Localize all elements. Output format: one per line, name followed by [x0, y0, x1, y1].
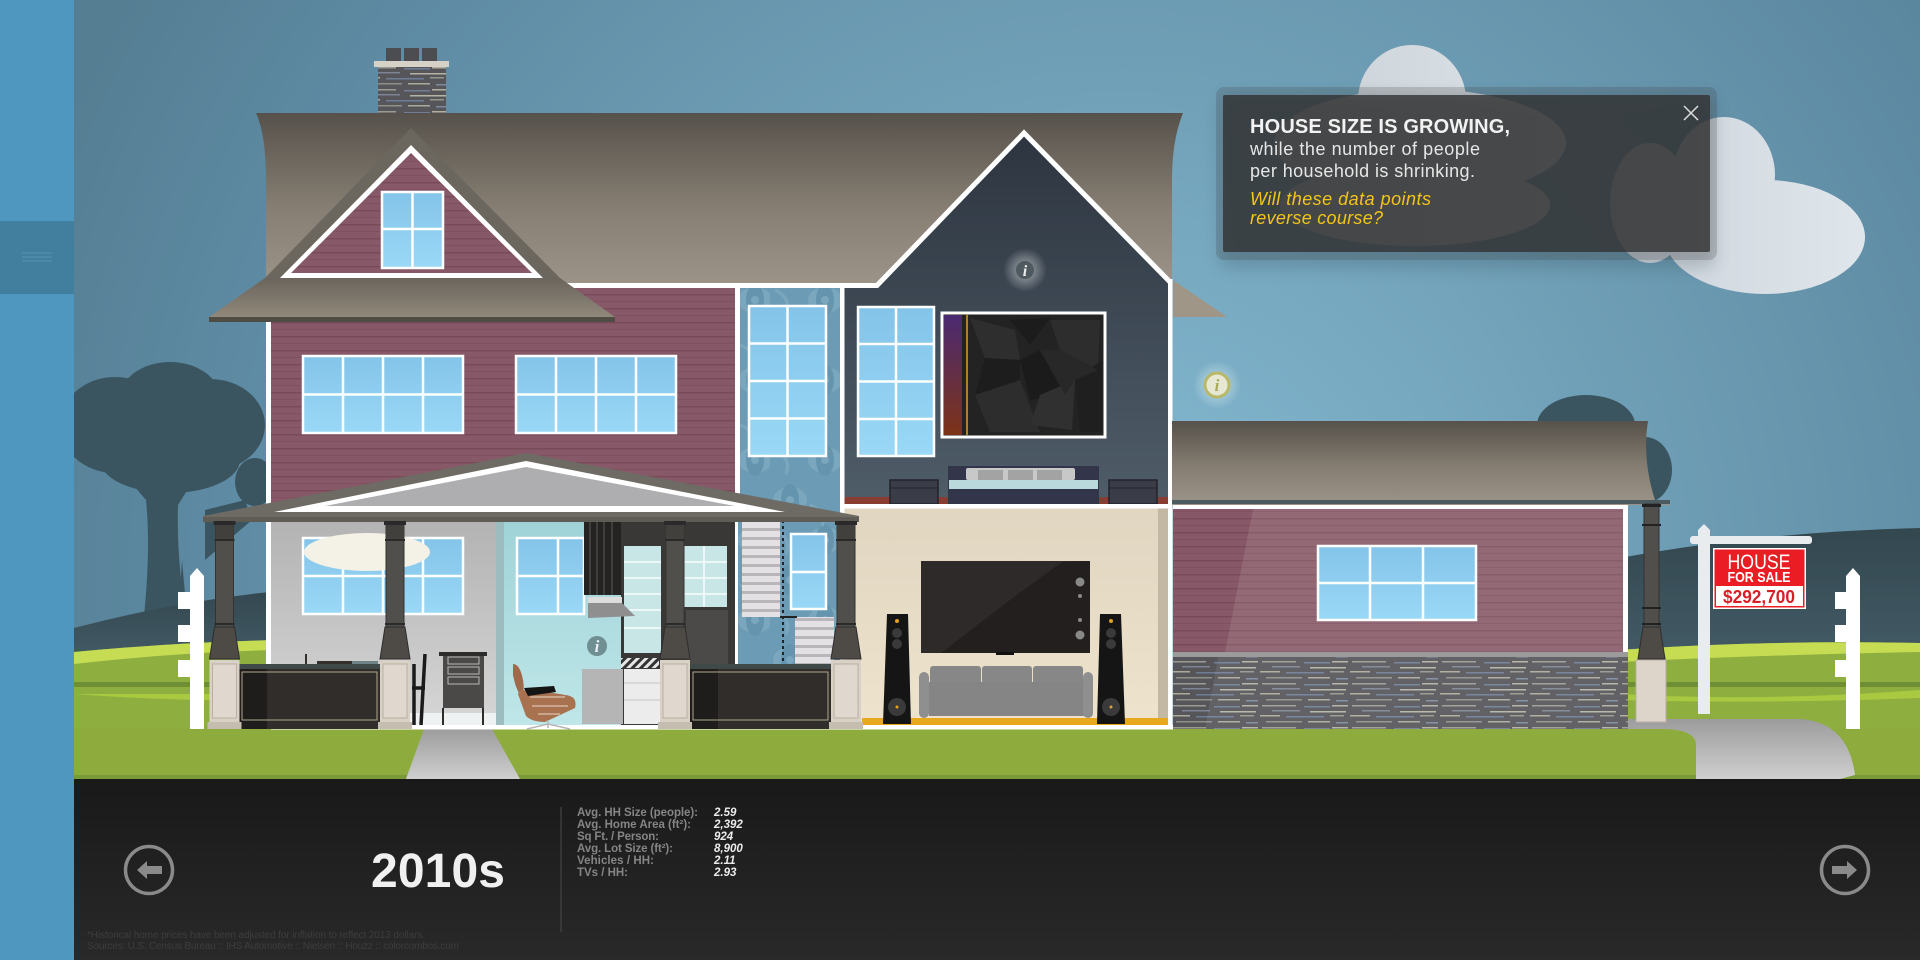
kitchen backsplash curtain and hood — [584, 520, 635, 618]
window: porch left — [303, 538, 463, 614]
window: media room — [858, 307, 934, 456]
main roof — [256, 113, 1183, 285]
speaker: left — [883, 614, 911, 724]
stat labels: Avg. HH Size (people): — [577, 807, 698, 819]
stat labels — [577, 807, 698, 879]
info icon: media room — [1003, 248, 1047, 292]
previous arrow — [126, 846, 172, 894]
callout body: while the number of people — [1249, 139, 1480, 159]
callout question: reverse course? — [1250, 208, 1383, 228]
tree: right silhouette — [1537, 395, 1672, 503]
front walkway — [406, 729, 520, 779]
info icon: house size — [1193, 361, 1241, 409]
info icon: media room: i — [1023, 263, 1028, 280]
footnote sources — [87, 930, 459, 952]
right roof overhang — [1173, 280, 1227, 317]
wall art — [942, 313, 1105, 437]
footer bar — [0, 779, 1920, 960]
computer on counter — [305, 654, 378, 664]
window: upper left — [303, 356, 463, 433]
dormer window — [382, 192, 443, 268]
callout question: Will these data points — [1250, 189, 1431, 209]
wallpapered stairwell — [738, 287, 842, 727]
stat values — [713, 807, 743, 879]
lounge chair — [513, 664, 576, 729]
callout question — [1250, 189, 1431, 228]
speaker: right — [1097, 614, 1125, 724]
hills — [74, 528, 1920, 660]
for sale sign — [1690, 524, 1812, 714]
fence: right — [1835, 568, 1860, 729]
porch column 4 — [829, 521, 863, 729]
chimney — [374, 48, 449, 114]
right wing wall with stone base — [1173, 505, 1628, 729]
window: stair landing — [791, 534, 826, 609]
footnote sources: Sources: U.S. Census Bureau :: IHS Automotive :: Nielsen :: Houzz :: colorcombos.com — [87, 941, 459, 952]
back lawn with stripes — [74, 640, 1920, 735]
upper right dark media room — [843, 135, 1168, 504]
porch gable roof — [203, 453, 859, 522]
sofa — [919, 666, 1093, 718]
right wing roof — [1172, 421, 1670, 505]
info callout box — [1216, 87, 1717, 268]
sidebar menu tab — [0, 221, 74, 294]
lower cream living room — [844, 508, 1168, 725]
info icon: kitchen — [587, 636, 607, 656]
footnote sources: *Historical home prices have been adjusted for inflation to reflect 2013 dollars. — [87, 930, 425, 941]
cloud: right of info box — [1610, 117, 1865, 294]
stat values: 2.59 — [713, 807, 737, 819]
porch interior: kitchen and office — [271, 520, 735, 725]
callout body: per household is shrinking. — [1250, 161, 1475, 181]
porch column 2 — [378, 521, 412, 729]
pendant lamp — [304, 533, 430, 571]
close icon — [1684, 106, 1698, 120]
fence: left — [178, 568, 204, 729]
window: kitchen — [517, 538, 584, 614]
stat values: 2,392 — [713, 819, 743, 831]
stat values: 2.93 — [713, 867, 737, 879]
kitchen cabinets — [582, 658, 660, 724]
media console with sofa bench — [844, 466, 1168, 504]
info icon: house size: i — [1215, 376, 1220, 395]
stat values: 924 — [714, 831, 734, 843]
porch planter: left — [239, 664, 380, 729]
info icon: kitchen: i — [595, 637, 600, 656]
porch planter: right — [690, 664, 831, 729]
callout heading: HOUSE SIZE IS GROWING, — [1250, 116, 1510, 138]
cloud: behind info box top — [1274, 45, 1566, 246]
tree: left silhouette — [60, 362, 275, 650]
stat labels: Sq Ft. / Person: — [577, 831, 659, 843]
stat values: 8,900 — [714, 843, 743, 855]
driveway — [1627, 719, 1855, 779]
right porch column — [1636, 504, 1666, 722]
porch column 1 — [208, 521, 242, 729]
next arrow — [1822, 846, 1868, 894]
stairs — [738, 520, 838, 725]
callout body — [1249, 139, 1480, 181]
upper storey siding wall — [268, 285, 736, 525]
stat labels: Avg. Home Area (ft²): — [577, 819, 691, 831]
desk — [412, 652, 487, 725]
floor divider lines and house outline — [266, 133, 1173, 730]
stat labels: Vehicles / HH: — [577, 855, 654, 867]
stat labels: Avg. Lot Size (ft²): — [577, 843, 673, 855]
dormer roof — [265, 128, 560, 278]
stat values: 2.11 — [713, 855, 736, 867]
window: stairwell tall — [749, 306, 826, 456]
stats divider — [560, 807, 562, 932]
front lawn — [74, 729, 1920, 779]
porch column 3 — [658, 521, 692, 729]
stats table — [577, 807, 743, 879]
window: right wing — [1318, 546, 1476, 620]
for sale sign: $292,700 — [1723, 587, 1795, 607]
lower eave below dormer — [209, 278, 615, 322]
decade heading: 2010s — [371, 845, 505, 898]
window: upper middle — [516, 356, 676, 433]
for sale sign: HOUSE — [1728, 551, 1790, 574]
left sidebar — [0, 0, 74, 960]
wall television — [921, 561, 1090, 655]
for sale sign: FOR SALE — [1728, 569, 1790, 586]
stat labels: TVs / HH: — [577, 867, 628, 879]
